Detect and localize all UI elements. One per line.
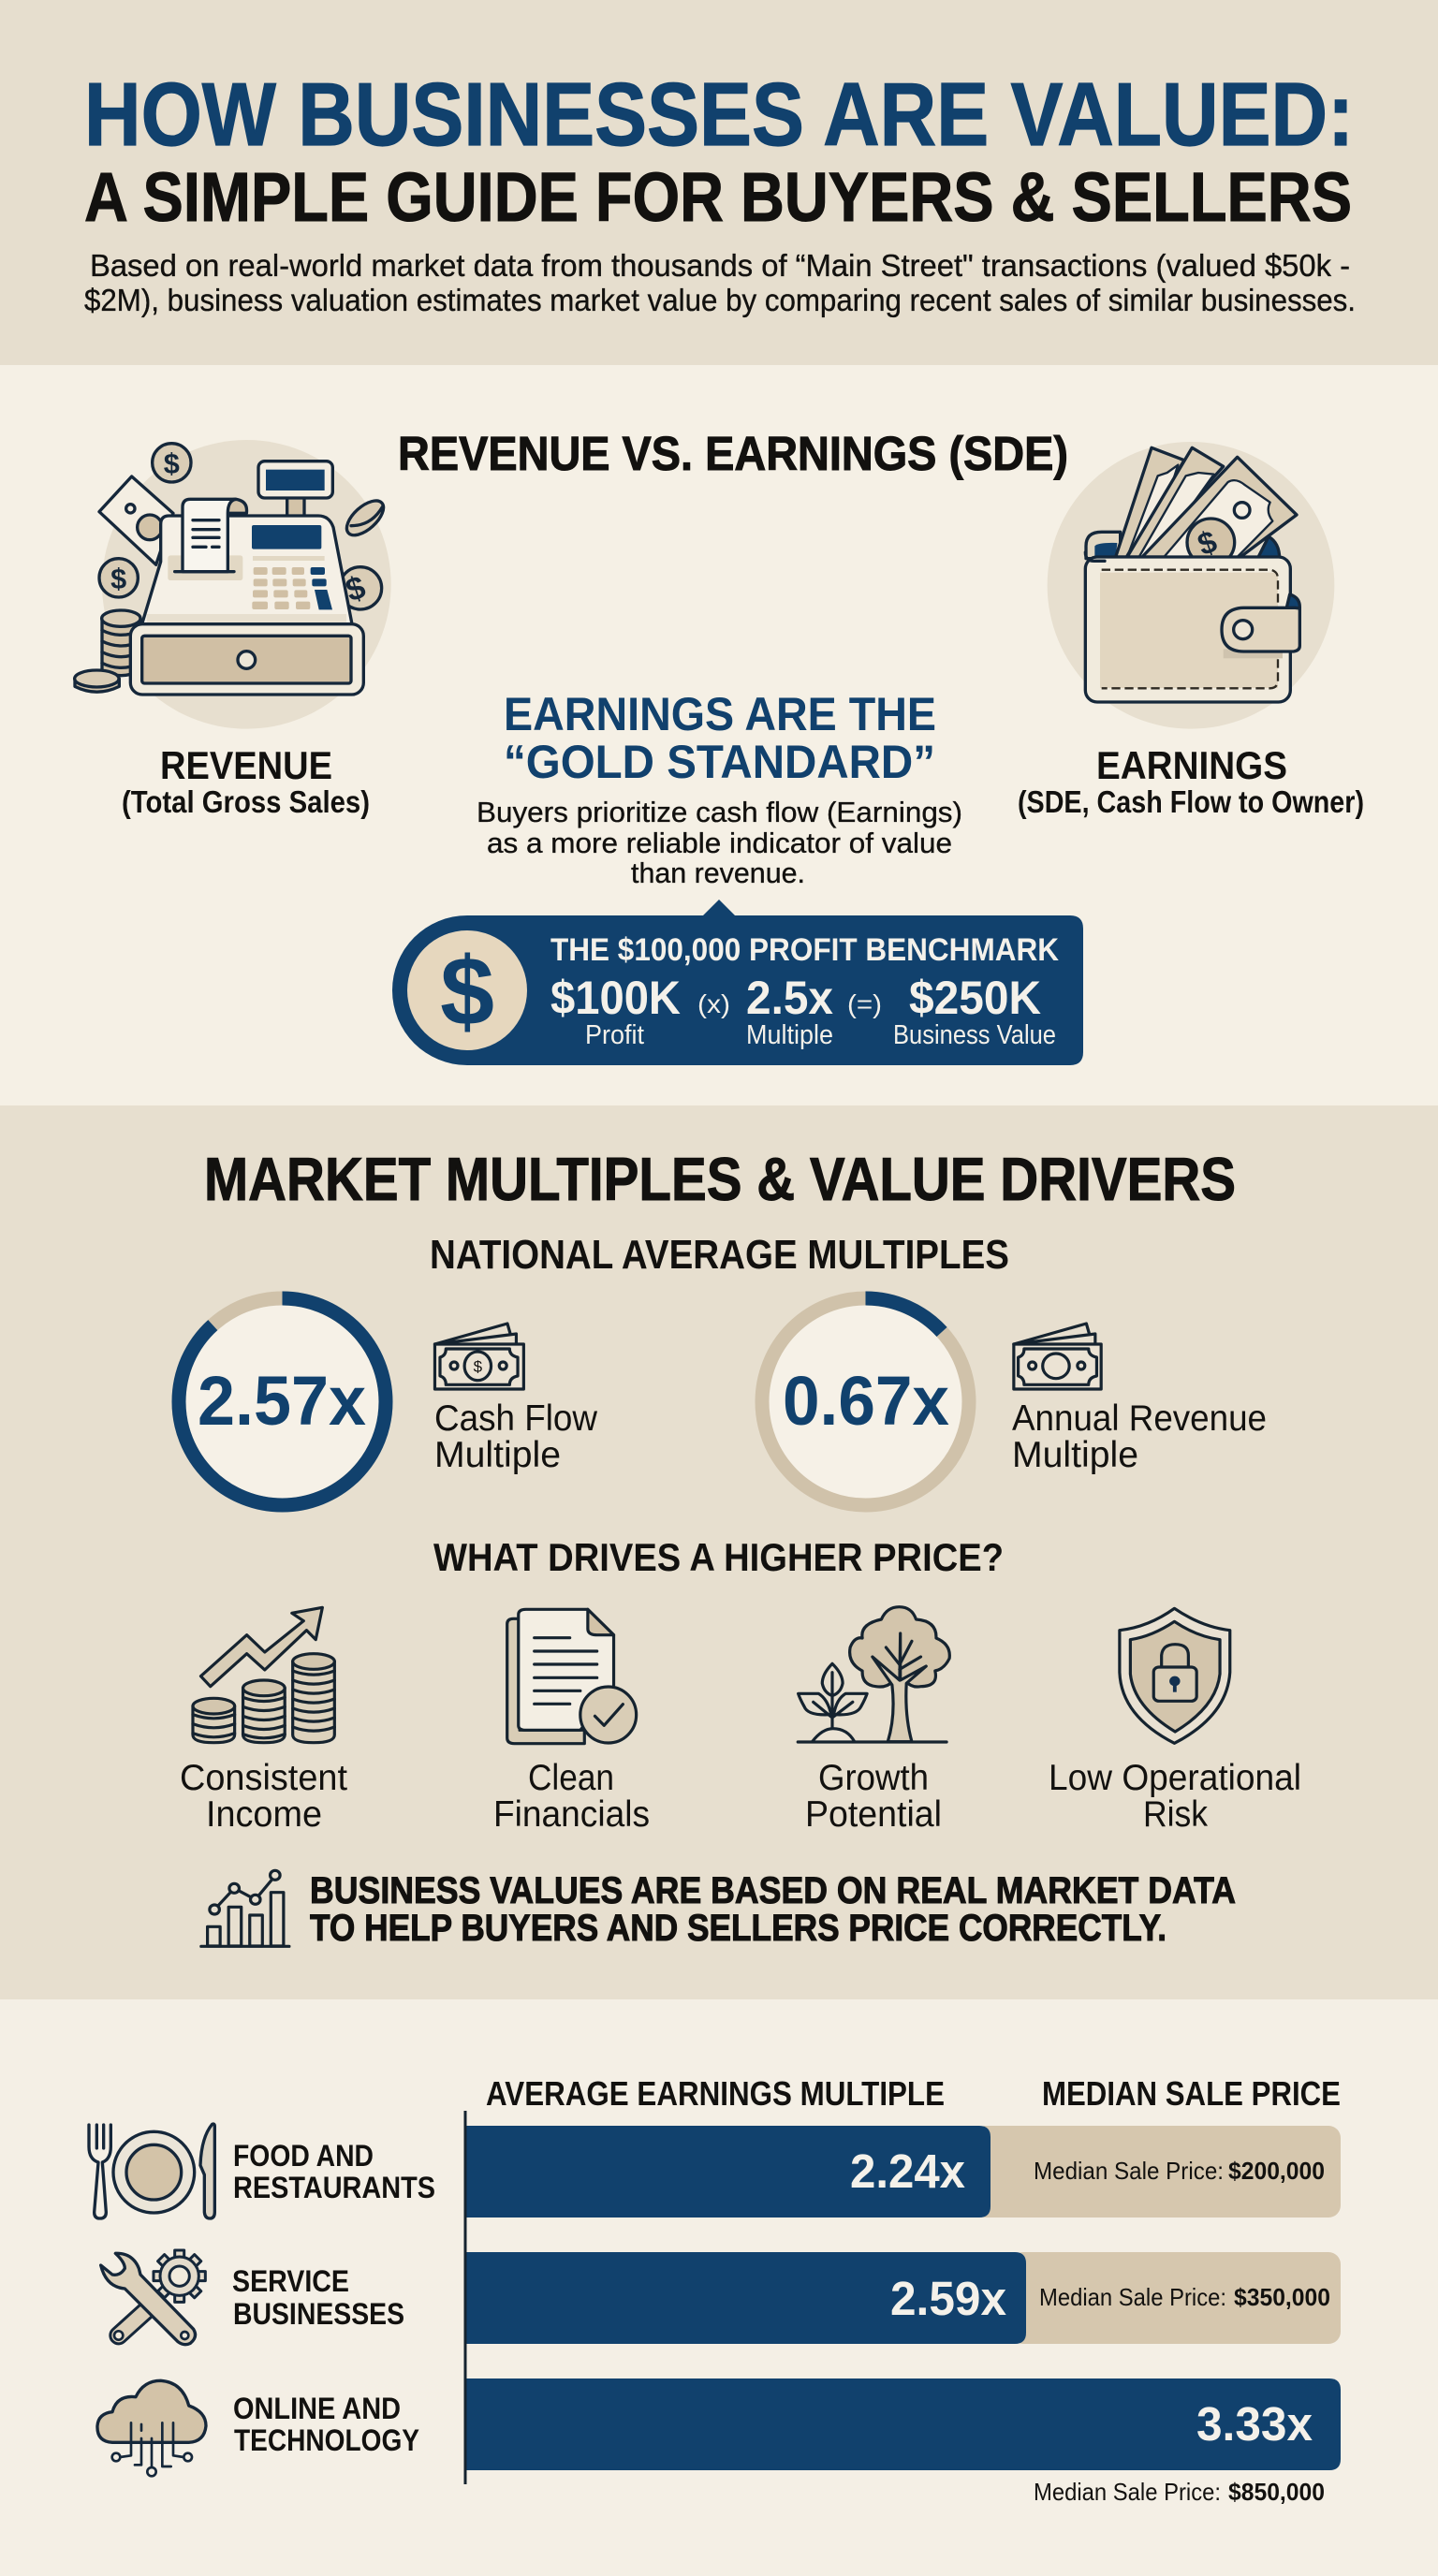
- callout: gold standard: as a more reliable indicator of value: [487, 827, 952, 859]
- text: market data statement: TO HELP BUYERS AND SELLERS PRICE CORRECTLY.: [310, 1908, 1167, 1949]
- section background: industries: [0, 1999, 1438, 2576]
- label: earnings: [1018, 743, 1364, 819]
- label: annual revenue multiple: Annual Revenue: [1012, 1398, 1267, 1439]
- bar: food and restaurants: [465, 2126, 1341, 2217]
- label: low operational risk: Low Operational: [1049, 1758, 1301, 1798]
- gauge: annual revenue multiple: [762, 1298, 969, 1505]
- label: food and restaurants: RESTAURANTS: [233, 2171, 435, 2204]
- title block: [84, 65, 1356, 317]
- benchmark equation: 2.5x: [746, 972, 833, 1024]
- bar: food and restaurants: Median Sale Price:: [1034, 2157, 1224, 2185]
- bar: service businesses: 2.59x: [890, 2272, 1006, 2325]
- label: clean financials: Clean: [528, 1758, 614, 1798]
- heading: revenue vs earnings: REVENUE VS. EARNINGS (SDE): [398, 427, 1068, 480]
- heading: market multiples: MARKET MULTIPLES & VALUE DRIVERS: [204, 1145, 1236, 1213]
- icon: growth potential: [798, 1607, 949, 1742]
- intro paragraph: [84, 248, 1356, 317]
- label: online and technology: [233, 2392, 419, 2457]
- icon: online and technology: [97, 2380, 206, 2476]
- column headers: [486, 2074, 1341, 2113]
- label: service businesses: SERVICE: [232, 2264, 349, 2298]
- label: clean financials: Financials: [493, 1794, 650, 1835]
- intro paragraph: $2M), business valuation estimates market value by comparing recent sales of similar businesses.: [84, 283, 1356, 317]
- gauge: cash flow multiple: 2.57x: [198, 1362, 366, 1440]
- benchmark equation: $100K: [550, 972, 681, 1024]
- benchmark equation: Profit: [585, 1020, 644, 1050]
- label: online and technology: TECHNOLOGY: [234, 2423, 419, 2457]
- gauge: annual revenue multiple: 0.67x: [783, 1362, 949, 1440]
- callout: gold standard: than revenue.: [631, 856, 805, 889]
- label: growth potential: Potential: [805, 1794, 942, 1835]
- label: revenue: [122, 743, 370, 819]
- text: market data statement: BUSINESS VALUES ARE BASED ON REAL MARKET DATA: [310, 1870, 1236, 1911]
- icon: consistent income: [193, 1607, 334, 1743]
- section background: market multiples: [0, 1105, 1438, 1999]
- bar: food and restaurants: $200,000: [1228, 2157, 1325, 2185]
- text: market data statement: [310, 1870, 1236, 1949]
- label: cash flow multiple: [434, 1398, 598, 1475]
- label: low operational risk: [1049, 1758, 1301, 1835]
- column headers: MEDIAN SALE PRICE: [1042, 2074, 1341, 2113]
- bar: service businesses: [465, 2252, 1341, 2344]
- benchmark heading: THE $100,000 PROFIT BENCHMARK: [550, 932, 1059, 968]
- callout: gold standard: “GOLD STANDARD”: [504, 736, 935, 788]
- label: consistent income: Income: [206, 1794, 322, 1835]
- section background: header: [0, 0, 1438, 365]
- benchmark equation: [550, 972, 1056, 1050]
- benchmark equation: (=): [847, 989, 882, 1018]
- label: consistent income: Consistent: [180, 1758, 347, 1798]
- gauge: cash flow multiple: [179, 1298, 386, 1505]
- label: earnings: EARNINGS: [1096, 743, 1287, 787]
- bar: service businesses: $350,000: [1234, 2283, 1330, 2311]
- label: consistent income: [180, 1758, 347, 1835]
- intro paragraph: Based on real-world market data from thousands of “Main Street" transactions (valued $50k -: [90, 248, 1350, 283]
- benchmark equation: Business Value: [893, 1020, 1056, 1050]
- label: service businesses: BUSINESSES: [233, 2297, 404, 2331]
- panel: profit benchmark: [392, 900, 1083, 1065]
- icon: banknote with dollar: [434, 1324, 523, 1389]
- icon: wallet with cash: $: [1194, 524, 1222, 563]
- icon: cash register: $: [164, 448, 180, 480]
- bar: food and restaurants: 2.24x: [850, 2144, 965, 2198]
- section background: revenue vs earnings: [0, 365, 1438, 1105]
- icon: banknote with dollar: $: [474, 1357, 483, 1375]
- label: annual revenue multiple: Multiple: [1012, 1435, 1138, 1475]
- icon: food and restaurants: [89, 2124, 214, 2218]
- heading: national average multiples: NATIONAL AVERAGE MULTIPLES: [430, 1232, 1009, 1278]
- label: cash flow multiple: Multiple: [434, 1435, 561, 1475]
- label: revenue: (Total Gross Sales): [122, 784, 370, 819]
- icon: dollar coin: [407, 930, 527, 1050]
- bar: online and technology: [465, 2378, 1341, 2506]
- chart axis: [464, 2111, 466, 2484]
- label: clean financials: [493, 1758, 650, 1835]
- label: earnings: (SDE, Cash Flow to Owner): [1018, 784, 1364, 819]
- label: annual revenue multiple: [1012, 1398, 1267, 1475]
- label: low operational risk: Risk: [1143, 1794, 1208, 1835]
- label: cash flow multiple: Cash Flow: [434, 1398, 598, 1439]
- icon: service businesses: [101, 2250, 205, 2345]
- icon: low operational risk: [1120, 1608, 1230, 1743]
- label: food and restaurants: [233, 2139, 435, 2204]
- benchmark equation: $250K: [909, 972, 1041, 1024]
- benchmark equation: Multiple: [746, 1020, 833, 1050]
- icon: banknote: [1014, 1324, 1101, 1389]
- icon: cash register: $: [342, 569, 370, 609]
- icon: dollar coin: $: [440, 938, 494, 1046]
- label: growth potential: [805, 1758, 942, 1835]
- heading: what drives a higher price: WHAT DRIVES A HIGHER PRICE?: [433, 1535, 1004, 1579]
- label: food and restaurants: FOOD AND: [233, 2139, 374, 2173]
- callout: gold standard: Buyers prioritize cash flow (Earnings): [477, 796, 962, 828]
- label: revenue: REVENUE: [160, 743, 332, 787]
- icon: clean financials: [507, 1609, 637, 1744]
- icon: bar chart with trend line: [201, 1870, 289, 1946]
- callout: gold standard: [477, 688, 962, 889]
- bar: service businesses: Median Sale Price:: [1039, 2283, 1226, 2311]
- label: growth potential: Growth: [818, 1758, 929, 1798]
- column headers: AVERAGE EARNINGS MULTIPLE: [486, 2074, 945, 2113]
- benchmark equation: (x): [697, 989, 730, 1018]
- icon: cash register: [75, 440, 391, 729]
- icon: cash register: $: [110, 564, 126, 595]
- bar chart: earnings multiple and median sale price: [464, 2074, 1341, 2506]
- icon: wallet with cash: [1048, 442, 1334, 729]
- bar: online and technology: 3.33x: [1196, 2397, 1313, 2451]
- label: service businesses: [232, 2264, 404, 2331]
- callout: gold standard: EARNINGS ARE THE: [504, 688, 936, 740]
- bar: online and technology: $850,000: [1228, 2478, 1325, 2506]
- bar: online and technology: Median Sale Price:: [1034, 2478, 1221, 2506]
- label: online and technology: ONLINE AND: [233, 2392, 401, 2425]
